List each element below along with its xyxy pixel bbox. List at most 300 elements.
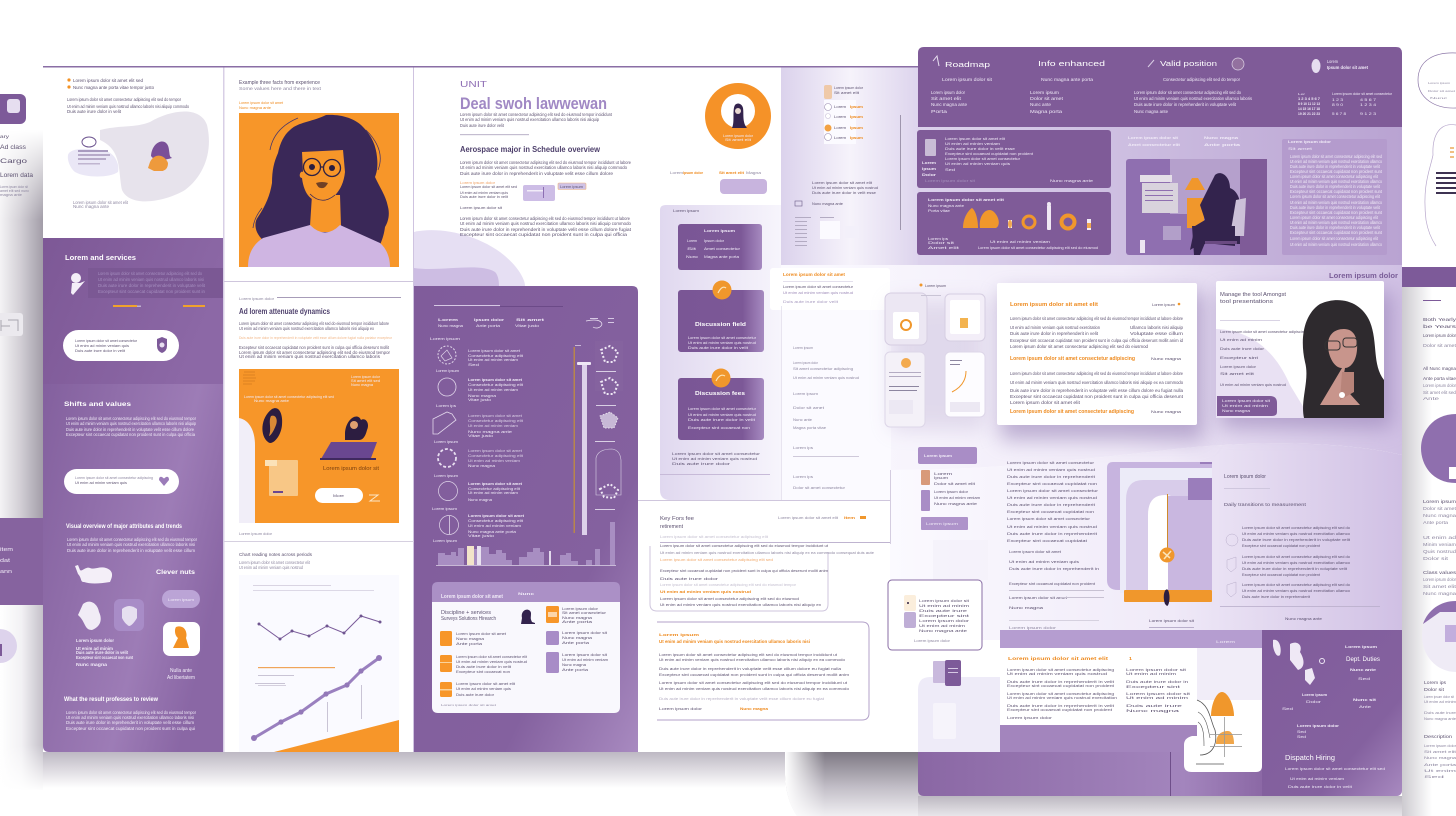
body text <box>460 160 631 176</box>
row 5: Nunc magna <box>468 498 492 502</box>
bottom-left second card: Duis aute irure dolor in reprehenderit in voluptate velit esse cillum dolore eu fugiat <box>659 697 824 701</box>
lavender content area under header <box>918 127 1402 268</box>
list column: Lorem ips <box>793 475 814 479</box>
right text panel: Ut enim ad minim veniam quis nostrud exercitation ullamco <box>1290 200 1382 205</box>
stamp text at top right of band: Lorem ipsum dolor <box>1329 273 1398 280</box>
lower tag and items: Lorem ipsum <box>926 522 958 526</box>
list column: Dolor sit amet <box>793 406 824 410</box>
column 1: top white panel <box>67 78 209 209</box>
lower tag and items: Nunc magna ante <box>934 502 977 506</box>
mini list: Lorem <box>834 105 846 109</box>
right text panel: Ut enim ad minim veniam quis nostrud exercitation ullamco <box>1290 220 1382 225</box>
mini calendars: Lor <box>1298 92 1305 96</box>
more text: Minim veniam <box>1423 542 1456 547</box>
card 1: Sit <box>687 247 696 251</box>
centre text column: Duis aute irure dolor in reprehenderit <box>1007 532 1098 536</box>
right text panel: Lorem ipsum dolor <box>1288 140 1332 144</box>
bullet list: Nunc magna ante porta vitae tempor justo <box>73 85 154 90</box>
text lower <box>460 206 632 237</box>
column labels: Sit amet <box>516 317 545 322</box>
lower tag and items <box>918 447 988 580</box>
intro band <box>88 268 223 307</box>
final text: Nunc magna ante <box>1424 717 1456 721</box>
card 2: Duis aute irure dolor in velit <box>688 346 749 350</box>
section text 2: Lorem ipsum dolor sit amet consectetur adipiscing elit sed do eiusmod tempor <box>66 416 196 421</box>
right text column: Ut enim ad minim veniam quis nostrud exercitation ullamco <box>1242 561 1350 565</box>
right text column: Duis aute irure dolor in reprehenderit in voluptate velit <box>1242 567 1347 571</box>
caption text: Duis aute irure dolor <box>672 462 731 466</box>
right text panel: Duis aute irure dolor in reprehenderit in voluptate velit <box>1290 205 1381 210</box>
phones heading: Lorem ipsum <box>925 284 946 288</box>
centre text column: Lorem ipsum dolor sit amet consectetur <box>1007 489 1099 493</box>
row 1: Lorem ipsum <box>436 369 459 373</box>
badge: orange circle with figure <box>705 83 771 149</box>
white note card with orange heading <box>770 268 890 310</box>
purple quote box: Lorem ipsum dolor sit <box>1222 399 1270 403</box>
caption text <box>672 452 761 466</box>
label under orange tile: Ad libertatem <box>167 675 195 681</box>
box B: purple chart box: Lorem ipsum dolor sit amet elit <box>928 198 1005 202</box>
white card: Nunc magna <box>456 637 484 641</box>
white text card with orange headings: Ut enim ad minim veniam quis nostrud exercitation <box>1010 325 1101 330</box>
row 1 <box>436 346 524 373</box>
illustration: woman portrait <box>1303 300 1384 418</box>
note text: Ut enim ad minim veniam quis nostrud <box>812 186 878 190</box>
kicker: UNIT <box>460 80 487 89</box>
white text card with orange headings: Excepteur sint occaecat cupidatat non proident sunt in culpa qui officia deserunt <box>1010 394 1184 399</box>
world map panel text: Lorem ipsum dolor sit amet consectetur elit sed <box>1285 766 1385 771</box>
world map panel text: Sed <box>1282 707 1293 711</box>
row 6: Ut enim ad minim veniam <box>468 524 521 528</box>
right text column: Excepteur sint occaecat cupidatat non proident <box>1242 544 1320 548</box>
icon: figure <box>71 273 85 295</box>
world map panel text: Dolor <box>1306 700 1323 704</box>
left offcut sheet: app icon and labels: Ad class <box>0 145 26 151</box>
row 1: Ut enim ad minim veniam <box>468 358 518 362</box>
column text: All Nunc magna <box>1423 366 1456 371</box>
column labels: Lorem <box>438 317 459 322</box>
card 1: Ipsum dolor <box>704 239 725 243</box>
white card: Lorem ipsum dolor sit amet consectetur elit <box>456 655 527 659</box>
mini list: Lorem <box>834 136 846 140</box>
right text panel: Excepteur sint occaecat cupidatat non proident sunt <box>1290 169 1383 174</box>
section text 2 <box>64 401 196 437</box>
white card: Surveys Solutions Hirearch <box>441 616 496 622</box>
column text: Ante <box>1423 396 1440 401</box>
row 2: Lorem ipsum dolor sit amet <box>468 378 523 382</box>
purple panel: data column <box>414 286 638 752</box>
row 4 <box>434 449 524 478</box>
labels under badge: Sit amet elit <box>719 171 745 175</box>
right text panel: Ut enim ad minim veniam quis nostrud exercitation ullamco <box>1290 179 1382 184</box>
more text: Class values <box>1423 570 1456 575</box>
white text card with orange headings: Lorem ipsum dolor sit amet consectetur adipiscing elit sed do eiusmod tempor incididunt ut labore dolore <box>1010 371 1184 376</box>
section text: Ut enim ad minim veniam quis nostrud exercitation ullamco laboris <box>239 354 381 359</box>
text lower: Duis aute irure dolor in reprehenderit in voluptate velit esse cillum dolore fugiat <box>460 227 632 232</box>
right icon strip <box>595 341 623 510</box>
bottom-left notes card: Lorem ipsum dolor sit amet elit <box>778 516 838 520</box>
note text: Duis aute irure dolor in velit esse <box>812 191 876 195</box>
centre text column: Lorem ipsum dolor sit amet <box>1009 550 1061 554</box>
centre text column: Nunc magna <box>1009 606 1043 610</box>
intro text: Ut enim ad minim veniam quis nostrud ullamco laboris nisi aliquip commodo <box>67 104 189 109</box>
row 3 <box>433 412 524 444</box>
block caption: Nunc magna <box>76 662 107 667</box>
phone 1 <box>885 293 927 345</box>
mini list: Lorem <box>834 126 846 130</box>
list column: Lorem ipsum <box>793 392 818 396</box>
text lower: Lorem ipsum dolor sit amet consectetur adipiscing elit sed do eiusmod tempor incididunt ut labore <box>460 216 630 221</box>
card 1: Nunc <box>686 255 698 259</box>
columns of text: Lorem ipsum dolor <box>931 90 965 95</box>
world map panel text: Nunc ante <box>1350 668 1376 672</box>
columns of text: Nunc magna ante <box>1134 109 1168 114</box>
column 3: top white panel <box>43 66 918 286</box>
caption: Nunc magna ante <box>73 204 109 209</box>
white note card with orange heading: Lorem ipsum dolor sit amet <box>783 272 846 277</box>
card 2: Ut enim ad minim veniam quis nostrud <box>688 341 756 345</box>
illustration: orange card with laptop: Nunc magna ante <box>254 399 289 403</box>
list column <box>781 306 891 500</box>
more text: Nunc magna <box>1423 591 1456 596</box>
icon: head bust <box>78 602 101 630</box>
final text: Dolor sit <box>1424 687 1445 692</box>
text notes: Ut enim ad minim veniam quis nostrud <box>1220 383 1286 387</box>
row 4: Consectetur adipiscing elit <box>468 454 524 458</box>
row 6: Consectetur adipiscing elit <box>468 519 524 523</box>
white text card with orange headings: Lorem ipsum dolor sit amet consectetur adipiscing <box>1010 356 1135 362</box>
purple quote box: Ut enim ad minim <box>1222 404 1268 408</box>
lower tag and items: Ipsum <box>934 476 948 480</box>
block caption <box>76 638 133 667</box>
right text panel <box>1282 139 1387 255</box>
white card: Lorem ipsum dolor sit amet elit <box>456 682 515 686</box>
box B: purple chart box: Ut enim ad minim veniam <box>990 240 1050 244</box>
more text: Quis nostrud <box>1423 549 1456 554</box>
card 3: Discussion fees <box>695 391 745 397</box>
lavender panel with purple cards <box>660 205 781 500</box>
card 1: Lorem ipsum <box>704 229 736 233</box>
final text: Duis aute irure <box>1424 711 1456 715</box>
bottom-left notes card: Lorem ipsum dolor sit amet consectetur adipiscing elit sed <box>660 558 773 562</box>
mini calendars: 19 20 21 22 23 <box>1298 112 1320 116</box>
white card: Sit amet consectetur <box>562 611 607 615</box>
white text card with orange headings: Duis aute irure dolor in reprehenderit in voluptate velit esse cillum dolore eu fugiat nulla <box>1010 388 1184 393</box>
white note card with orange heading: Lorem ipsum dolor sit amet consectetur <box>783 285 854 289</box>
bottom right composite panel <box>918 630 1402 796</box>
left text: Lorem ipsum dolor sit amet consectetur adipiscing <box>1007 692 1114 696</box>
white note card with orange heading: Ut enim ad minim veniam quis nostrud <box>783 291 853 295</box>
row 5: Consectetur adipiscing elit <box>468 487 521 491</box>
columns of text: Dolor sit amet <box>1030 96 1064 101</box>
bottom-left second card <box>657 622 869 720</box>
bottom-left notes card: Lorem ipsum dolor sit amet consectetur adipiscing elit <box>660 535 768 539</box>
text lower: Lorem ipsum dolor sit <box>460 206 503 210</box>
box A: purple text box: Lorem ipsum dolor sit <box>925 179 975 183</box>
white text card with orange headings: Nunc magna <box>1151 356 1182 361</box>
final text: Lorem ipsum dolor <box>1424 744 1456 748</box>
left offcut sheet: app icon and labels: Lorem data <box>0 173 34 179</box>
purple half disc <box>1421 414 1456 483</box>
bottom-left notes card: Ut enim ad minim veniam quis nostrud exercitation ullamco laboris nisi aliquip ex <box>660 603 821 607</box>
left offcut: circle badge <box>0 629 17 663</box>
blob <box>414 230 525 286</box>
card 3 <box>678 368 764 440</box>
icon: top-right loop <box>586 318 614 328</box>
white card: Lorem ipsum dolor sit <box>562 631 607 635</box>
box A: purple text box <box>917 130 1111 188</box>
icon: orange figure tile <box>163 622 200 656</box>
speech outline: Dolor sit amet <box>1428 89 1455 93</box>
bottom-left notes card: Ut enim ad minim veniam quis nostrud exercitation ullamco laboris nisi aliquip ex ea commodo consequat duis aute <box>660 551 874 555</box>
portrait card: tool presentations <box>1220 299 1274 305</box>
bottom-left notes card: Lorem ipsum dolor sit amet consectetur adipiscing elit sed do eiusmod tempor incididunt ut <box>660 544 829 548</box>
list column: Ut enim ad minim veniam quis nostrud <box>793 376 859 380</box>
text notes: Sit amet elit <box>1220 372 1254 376</box>
bottom-left notes card: Lorem ipsum dolor sit amet consectetur adipiscing elit sed do eiusmod tempor <box>660 583 797 587</box>
section heading 3: Lorem ipsum dolor sit amet consectetur adipiscing elit sed do eiusmod tempor <box>67 537 197 542</box>
white card: Nunc magna <box>562 663 586 667</box>
mini card <box>523 185 555 201</box>
small outlined card: Duis aute irure <box>919 609 967 613</box>
ghost tile <box>933 703 956 739</box>
orange heading: 1 <box>1129 656 1132 662</box>
lower tag and items: Lorem ipsum <box>924 453 952 458</box>
note list: Lorem ipsum dolor sit amet elit sed <box>460 185 517 189</box>
caption text: Ut enim ad minim veniam quis nostrud <box>672 457 757 461</box>
right text: Ut enim ad minim <box>1126 672 1176 676</box>
left offcut: purple strip <box>0 518 43 605</box>
more text: Ut enim ad <box>1423 535 1456 540</box>
box A: purple text box: Ut enim ad minim veniam quis <box>945 162 1010 166</box>
section heading 4: Excepteur sint occaecat cupidatat non proident sunt in culpa qui <box>66 726 195 731</box>
pill card 2 <box>64 469 179 494</box>
right text column: Lorem ipsum dolor sit amet consectetur adipiscing elit sed do <box>1242 555 1350 559</box>
white card: Lorem ipsum dolor sit amet <box>441 703 496 707</box>
mini list: Ipsum <box>850 105 863 109</box>
box A: purple text box: Nunc magna ante <box>1050 179 1093 183</box>
white card: Lorem ipsum dolor sit <box>562 653 607 657</box>
centre text column: Excepteur sint occaecat cupidatat non proident <box>1009 582 1095 586</box>
centre text column: Ut enim ad minim veniam quis nostrud <box>1007 496 1097 500</box>
centre text column: Duis aute irure dolor in reprehenderit in <box>1009 567 1099 571</box>
section heading: Lorem and services <box>65 255 136 262</box>
note list: Lorem ipsum dolor <box>460 181 496 185</box>
columns of text: Nunc magna ante <box>931 102 967 107</box>
card shadows in band <box>890 292 1392 440</box>
row 1: Sed <box>468 363 479 367</box>
right text column <box>1149 474 1380 628</box>
right text: Duis aute irure <box>1126 704 1182 708</box>
column labels: Nunc magna <box>438 324 463 328</box>
list column: Nunc ante <box>793 418 812 422</box>
portrait card <box>1216 281 1384 418</box>
body text: Lorem ipsum dolor sit amet consectetur adipiscing elit sed do eiusmod tempor incididunt ut labore <box>460 160 631 165</box>
white text card with orange headings: Lorem ipsum dolor sit amet consectetur adipiscing elit sed do eiusmod tempor incididunt ut labore dolore <box>1010 316 1184 321</box>
row 2: Ut enim ad minim veniam <box>468 388 518 392</box>
more text <box>1423 499 1456 596</box>
badge: orange circle with figure: Sit amet elit <box>725 138 751 142</box>
left text <box>1007 668 1117 720</box>
right text <box>1126 668 1192 713</box>
list column: Sit amet consectetur adipiscing <box>793 367 853 371</box>
centre text column: Ut enim ad minim veniam quis nostrud <box>1007 525 1097 529</box>
nav labels <box>933 56 1368 73</box>
section text 2: Duis aute irure dolor in reprehenderit in voluptate velit esse cillum dolore <box>66 427 194 432</box>
final text: Lorem ipsum dolor sit <box>1424 695 1454 699</box>
column text: be Years <box>1423 324 1456 329</box>
right text column: Daily transitions to measurement <box>1224 502 1307 507</box>
row 4: Lorem ipsum <box>434 474 458 478</box>
card 1 <box>678 224 762 270</box>
top centre strip <box>781 66 919 265</box>
column text: Sit amet elit sed <box>1423 390 1456 395</box>
illustration: woman with glasses portrait <box>239 113 399 267</box>
card 3: Duis aute irure dolor in velit <box>688 418 756 422</box>
white card: Discipline + services <box>441 610 492 616</box>
nav labels: Info enhanced <box>1038 59 1105 68</box>
centre text column: Excepteur sint occaecat cupidatat non <box>1007 510 1094 514</box>
labels under badge: Magna <box>746 171 761 175</box>
purple quote box: Nunc magna <box>1222 409 1250 413</box>
mini calendars: Lorem ipsum dolor sit amet consectetur <box>1332 92 1393 96</box>
lavender middle heading: Nunc magna <box>1204 136 1239 140</box>
column 2: white panels <box>223 66 414 752</box>
section heading 4: Ut enim ad minim veniam quis nostrud exercitation ullamco laboris nisi <box>66 715 194 720</box>
column 1: purple panel <box>43 238 223 752</box>
mini calendars: 9 1 2 3 <box>1360 112 1376 116</box>
header text <box>239 80 322 110</box>
speech outline <box>1418 53 1456 108</box>
section heading: Ad lorem attenuate dynamics <box>239 307 330 316</box>
label under orange tile <box>167 668 195 681</box>
world map panel text: Sed <box>1358 677 1370 681</box>
row 6: Vitae justo <box>468 534 494 538</box>
right text column: Lorem ipsum dolor sit amet consectetur adipiscing elit sed do <box>1242 583 1350 587</box>
white text card with orange headings <box>997 283 1197 425</box>
more text: Lorem ipsum <box>1423 499 1456 504</box>
portrait card: Manage the tool Amongst <box>1220 292 1286 298</box>
section heading <box>239 297 401 316</box>
final text: Ante porta <box>1424 763 1456 767</box>
illustration: orange card with laptop: Nunc magna <box>351 383 373 387</box>
left text: Ut enim ad minim veniam quis nostrud exercitation <box>1007 696 1117 700</box>
final text <box>1424 680 1456 779</box>
intro band: Excepteur sint occaecat cupidatat non proident sunt in <box>98 289 205 294</box>
section heading 4 <box>64 696 196 731</box>
white card: Nunc magna <box>562 636 592 640</box>
right text panel: Lorem ipsum dolor sit amet consectetur adipiscing elit <box>1290 194 1381 199</box>
table <box>795 217 859 246</box>
lavender middle heading: Lorem ipsum dolor sit <box>1128 136 1179 140</box>
centre text column: Lorem ipsum dolor sit amet consectetur <box>1007 461 1095 465</box>
intro text: Duis aute irure dolor velit <box>460 123 505 128</box>
box A: purple text box: Excepteur sint occaecat cupidatat non proident <box>945 152 1033 156</box>
speech outline: Nunc <box>1430 96 1449 100</box>
right text: Lorem ipsum dolor sit <box>1126 668 1188 672</box>
section text <box>239 321 393 359</box>
top right purple header <box>918 47 1402 127</box>
bottom-left second card: Nunc magna <box>740 707 768 711</box>
text notes: Ut enim ad minim <box>1220 338 1262 342</box>
icon: shield <box>157 337 167 353</box>
mini calendars: 8 9 0 <box>1332 103 1343 107</box>
row 5: Lorem ipsum <box>432 507 457 511</box>
right text column: Lorem ipsum dolor sit <box>1149 619 1194 623</box>
pill card 2: Ut enim ad minim veniam quis <box>75 481 127 485</box>
block caption: Duis aute irure dolor in velit <box>76 650 128 655</box>
left text: Ut enim ad minim veniam quis nostrud <box>1007 672 1107 676</box>
card 2: Lorem ipsum dolor sit amet consectetur <box>688 336 757 340</box>
right text column: Ut enim ad minim veniam quis nostrud exercitation ullamco <box>1242 589 1350 593</box>
left offcut sheet: app icon and labels: Lorem ipsum dolor sit <box>0 185 28 189</box>
icon: cloud figure <box>75 565 112 584</box>
label under orange tile: Nulla ante <box>170 668 192 674</box>
final text: Lorem ips <box>1424 680 1447 685</box>
card 1: Lorem <box>687 239 697 243</box>
illustration: orange card with laptop: Lorem ipsum dolor sit amet consectetur adipiscing elit sed <box>244 395 334 399</box>
box B: purple chart box <box>917 192 1111 255</box>
box A: purple text box: Sed <box>945 168 955 172</box>
box B: purple chart box: Amet elit <box>928 246 959 250</box>
purple bar <box>1402 267 1456 287</box>
columns of text: Porta <box>931 109 948 114</box>
mini list: Ipsum <box>850 136 863 140</box>
more text: Dolor sit <box>1423 556 1449 561</box>
illustration: orange card with laptop: More <box>333 494 344 498</box>
nav labels: Lorem <box>1327 59 1338 64</box>
left text: Lorem ipsum dolor sit amet consectetur adipiscing <box>1007 668 1114 672</box>
mini list: Ipsum <box>850 115 863 119</box>
row 1: Consectetur adipiscing elit <box>468 354 524 358</box>
illustration: orange card with laptop: Lorem ipsum dolor sit <box>323 466 379 472</box>
mini calendars <box>1298 92 1393 116</box>
white card: Lorem ipsum dolor sit amet <box>456 632 506 636</box>
centre text column: Excepteur sint occaecat cupidatat <box>1007 539 1088 543</box>
bottom-left notes card: Ut enim ad minim veniam quis nostrud <box>660 590 751 594</box>
box A: purple text box: Ut enim ad minim veniam <box>945 142 1000 146</box>
bottom-left notes card: Key Fors fee <box>660 516 694 522</box>
left offcut: gray tile <box>0 313 23 336</box>
card 3: Lorem ipsum dolor sit amet consectetur <box>688 407 757 411</box>
columns of text: Magna porta <box>1030 109 1063 114</box>
left text: Duis aute irure dolor in reprehenderit in velit <box>1007 680 1115 684</box>
row 3: Lorem ipsum <box>434 440 458 444</box>
chart: orange shapes <box>963 202 1091 230</box>
left offcut: purple strip: ann <box>0 569 12 575</box>
left offcut: purple strip: dat <box>0 558 11 564</box>
right text column: Lorem ipsum dolor <box>1224 474 1266 480</box>
section text: Lorem ipsum dolor sit amet consectetur adipiscing elit sed do eiusmod tempor incididunt labore <box>239 321 389 326</box>
right text: Lorem ipsum dolor sit <box>1126 692 1192 696</box>
right text column: Duis aute irure dolor in reprehenderit in voluptate velit <box>1242 538 1350 542</box>
vertical bars <box>574 345 591 535</box>
section text: Lorem ipsum dolor sit amet consectetur adipiscing elit sed do eiusmod tempor <box>239 350 390 355</box>
body text: Ut enim ad minim veniam quis nostrud exercitation ullamco laboris nisi aliquip commodo <box>460 165 627 170</box>
row 4: Lorem ipsum dolor sit amet <box>468 449 523 453</box>
bottom-left second card: Ut enim ad minim veniam quis nostrud exercitation ullamco laboris nisi <box>659 639 810 644</box>
bottom-left second card: Lorem ipsum dolor sit amet consectetur adipiscing elit sed do eiusmod tempor incididunt ut <box>659 653 838 657</box>
mini calendars: 1 2 3 <box>1332 98 1343 102</box>
note list: Duis aute irure dolor in velit <box>460 195 509 199</box>
caption: Lorem ipsum dolor sit amet elit <box>73 200 129 205</box>
text notes: Excepteur sint <box>1220 356 1258 360</box>
caption text: Lorem ipsum dolor sit amet consectetur <box>672 452 761 456</box>
illustration: sketch with orange dome <box>1184 692 1262 772</box>
card 3: Ut enim ad minim veniam quis nostrud <box>688 413 756 417</box>
lavender middle heading: Amet consectetur elit <box>1128 143 1181 147</box>
row 1: Lorem ipsum dolor sit amet <box>468 349 521 353</box>
